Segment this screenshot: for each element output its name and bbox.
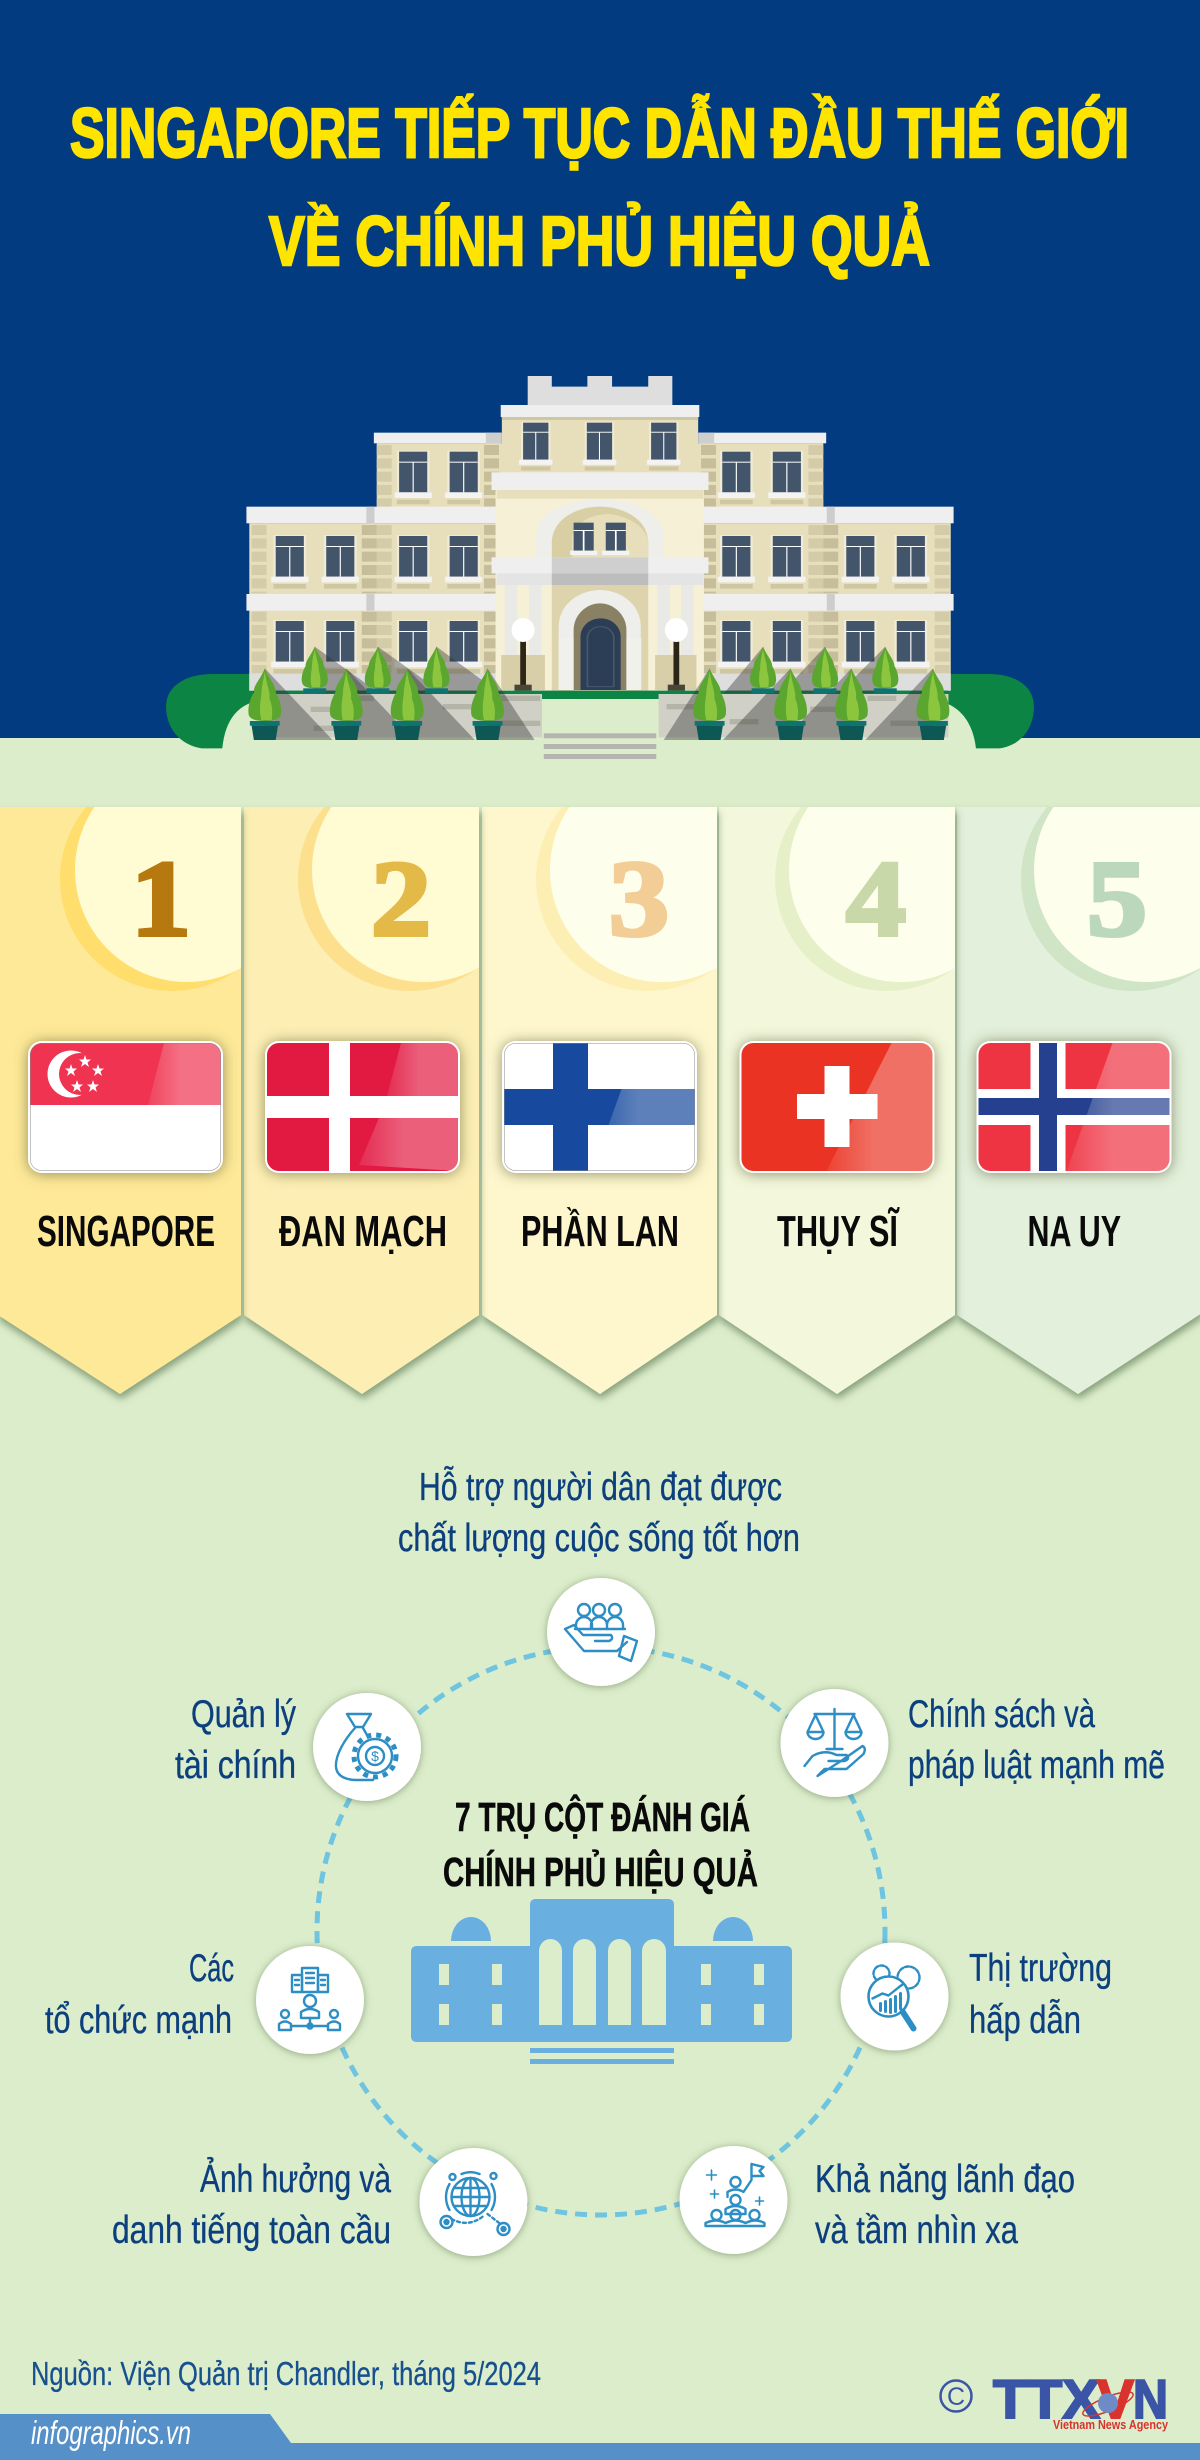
portico bands <box>492 557 709 573</box>
logo: TTXVN Vietnam News Agency: TTX <box>993 2368 1100 2430</box>
logo: TTXVN Vietnam News Agency: N <box>1133 2368 1168 2430</box>
rank number 3: 3 <box>609 840 669 959</box>
label: PHẦN LAN <box>521 1206 679 1256</box>
tree shadows <box>265 647 933 740</box>
lamps <box>514 640 685 691</box>
green strip <box>273 691 543 694</box>
label: SINGAPORE <box>37 1207 215 1256</box>
cornices and bands <box>246 507 954 523</box>
tower cornice <box>501 405 699 417</box>
flag: Norway <box>976 1041 1172 1173</box>
logo: TTXVN Vietnam News Agency: Vietnam News Agency <box>1053 2417 1169 2432</box>
text: Các <box>189 1947 234 1990</box>
text: Hỗ trợ người dân đạt được <box>419 1466 782 1509</box>
text: Quản lý <box>191 1693 296 1736</box>
front lawn mound <box>222 700 977 760</box>
site name: infographics.vn <box>31 2414 191 2451</box>
pillar: global influence <box>112 2148 528 2256</box>
pillar: financial management: tài chính <box>175 1744 296 1787</box>
flag: Finland <box>502 1041 697 1173</box>
center heading <box>443 1794 758 1895</box>
icon: leader with flag on pyramid <box>706 2164 764 2226</box>
flag: Switzerland <box>740 1041 934 1173</box>
center heading: 7 TRỤ CỘT ĐÁNH GIÁ <box>455 1794 750 1840</box>
rank number 1: 1 <box>131 840 191 959</box>
entrance recess <box>552 585 648 691</box>
text: Chính sách và <box>908 1693 1095 1736</box>
icon: people in hand <box>565 1604 637 1661</box>
door <box>559 590 641 690</box>
hedges <box>166 674 1034 748</box>
tower crenellation <box>528 376 672 405</box>
path and steps <box>542 699 659 760</box>
header navy panel <box>0 0 1200 738</box>
panel: rank 2 Denmark <box>241 807 486 1402</box>
pillar: attractive market: hấp dẫn <box>969 1999 1081 2042</box>
pillar: attractive market <box>840 1942 1112 2050</box>
arch <box>536 499 664 558</box>
panel: rank 5 Norway <box>957 758 1200 1394</box>
rank number 5: 5 <box>1087 840 1147 959</box>
pillar: strong institutions: tổ chức mạnh <box>45 1999 232 2042</box>
central frontage <box>496 490 704 691</box>
windows <box>271 422 929 674</box>
text: Ảnh hưởng và <box>200 2157 391 2201</box>
pillar: strong institutions <box>45 1946 364 2054</box>
footer bar with site tab <box>0 2414 1200 2460</box>
icon: organisation network <box>279 1968 340 2030</box>
pillar: quality of life: chất lượng cuộc sống tốt hơn <box>398 1517 800 1560</box>
columns <box>505 585 694 655</box>
icon: blue government building <box>411 1899 792 2064</box>
icon: money bag and gear <box>336 1714 396 1780</box>
label: NA UY <box>1028 1207 1121 1256</box>
terrace walls <box>275 694 542 737</box>
center heading: CHÍNH PHỦ HIỆU QUẢ <box>443 1849 758 1895</box>
text: Thị trường <box>969 1947 1112 1990</box>
pillar: leadership and vision: và tầm nhìn xa <box>815 2209 1018 2252</box>
illustration: government building <box>166 376 1034 760</box>
label: ĐAN MẠCH <box>279 1207 447 1256</box>
pillar: leadership and vision <box>680 2146 1075 2254</box>
icon: magnifier with chart and gears <box>868 1966 920 2028</box>
pillar: quality of life <box>398 1466 800 1686</box>
rank number 4: 4 <box>846 840 906 959</box>
icon: money bag and gear: $ <box>371 1748 379 1764</box>
dashed ring connecting the seven pillars <box>317 1647 885 2215</box>
pillar: strong policies and law <box>780 1689 1165 1797</box>
pillar: financial management <box>175 1693 421 1801</box>
walls <box>502 417 698 475</box>
source note: Nguồn: Viện Quản trị Chandler, tháng 5/2024 <box>31 2355 541 2392</box>
trees <box>248 647 949 740</box>
text: Khả năng lãnh đạo <box>815 2158 1075 2201</box>
upper wing cornice <box>374 433 501 443</box>
panel: rank 1 Singapore <box>0 807 248 1402</box>
logo: TTXVN Vietnam News Agency <box>940 2368 1169 2432</box>
title <box>70 93 1129 280</box>
flag: Denmark <box>265 1041 460 1173</box>
logo: TTXVN Vietnam News Agency: V <box>1097 2368 1134 2430</box>
title: VỀ CHÍNH PHỦ HIỆU QUẢ <box>269 201 930 280</box>
label: THỤY SĨ <box>777 1206 900 1256</box>
flag: Singapore <box>28 1041 223 1173</box>
pillar: global influence: danh tiếng toàn cầu <box>112 2209 391 2252</box>
panel: rank 4 Switzerland <box>716 807 961 1402</box>
stone quoins <box>259 445 942 673</box>
icon: scales on hand <box>804 1709 865 1776</box>
icon: globe network <box>440 2172 510 2235</box>
rank number 2: 2 <box>371 840 431 959</box>
logo: TTXVN Vietnam News Agency: C <box>947 2383 965 2411</box>
panel: rank 3 Finland <box>479 807 723 1402</box>
